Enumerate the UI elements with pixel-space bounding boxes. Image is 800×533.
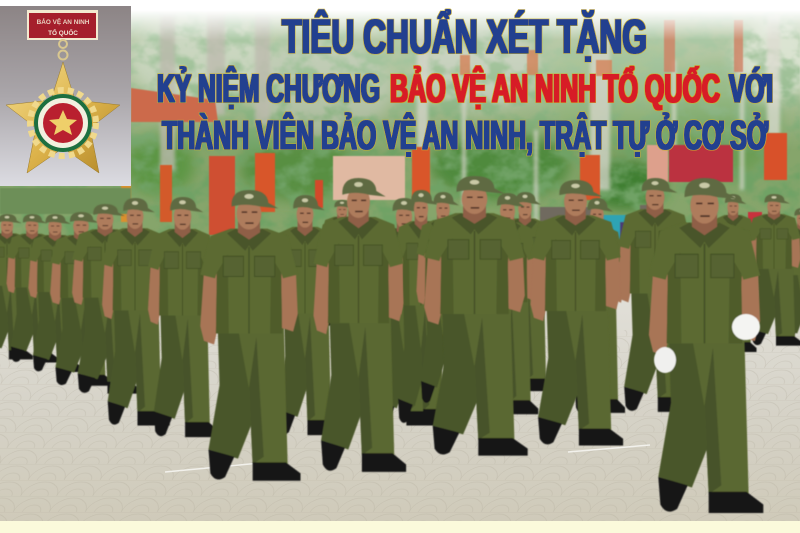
spectators in the background — [0, 188, 762, 265]
guard, centre — [313, 178, 406, 472]
guard, centre left — [200, 190, 301, 481]
foliage texture — [0, 0, 800, 300]
rows of marching guards behind — [0, 178, 800, 437]
bottom strip — [0, 521, 800, 533]
pavement — [0, 290, 800, 522]
guard, centre right — [424, 176, 528, 456]
panel: medal — [0, 6, 131, 186]
title line 2 blue end: VỚI — [729, 65, 773, 111]
medal rings — [58, 40, 68, 60]
tree trunks and flag poles — [160, 10, 780, 230]
title — [157, 9, 773, 158]
white fade at top of photo — [0, 0, 800, 40]
medal ribbon plate: BẢO VỆ AN NINH — [37, 17, 90, 26]
banners and red flags — [121, 20, 787, 235]
guard in white gloves, foreground right — [649, 178, 763, 513]
guard, right — [530, 180, 623, 445]
medal ribbon plate — [27, 10, 98, 40]
title line 2 blue lead: KỶ NIỆM CHƯƠNG — [157, 65, 380, 111]
medal star — [6, 62, 120, 173]
medal ribbon plate: TỔ QUỐC — [48, 27, 78, 37]
